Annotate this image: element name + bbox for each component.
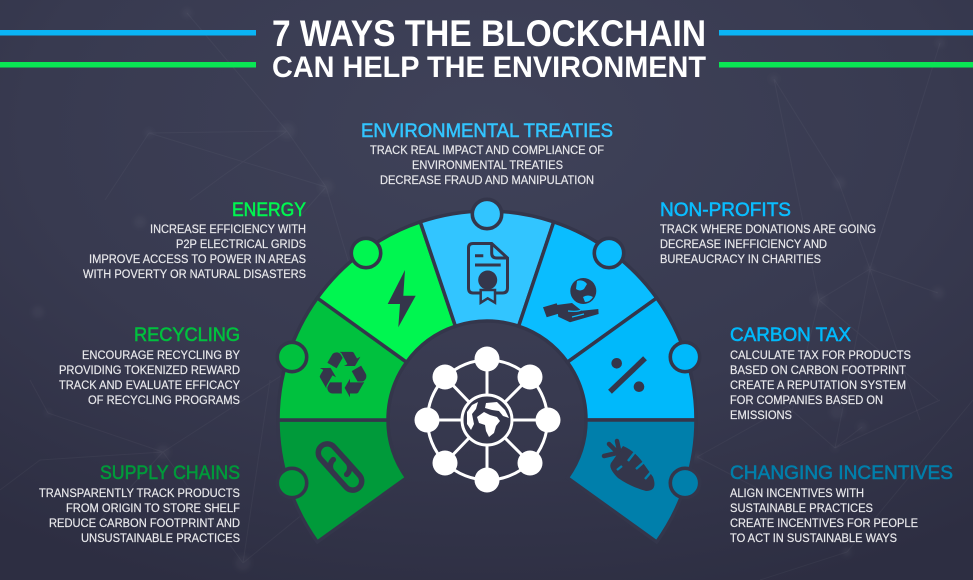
text block: REDUCE CARBON FOOTPRINT AND xyxy=(49,518,240,530)
panel: energy xyxy=(83,199,306,281)
text block xyxy=(59,350,240,407)
text block: BUREAUCRACY IN CHARITIES xyxy=(660,254,821,266)
panel: supply chains xyxy=(39,462,240,545)
title line 1: 7 WAYS THE BLOCKCHAIN xyxy=(272,13,706,54)
icon: certificate xyxy=(468,244,508,303)
segment: environmental treaties xyxy=(420,211,554,326)
title xyxy=(0,13,973,84)
text block: WITH POVERTY OR NATURAL DISASTERS xyxy=(83,269,306,281)
text block: TRACK AND EVALUATE EFFICACY xyxy=(59,380,240,392)
heading: ENVIRONMENTAL TREATIES xyxy=(361,120,613,142)
center blockchain network icon xyxy=(414,346,560,492)
text block: PROVIDING TOKENIZED REWARD xyxy=(59,365,240,377)
text block: UNSUSTAINABLE PRACTICES xyxy=(81,533,240,545)
heading: CHANGING INCENTIVES xyxy=(730,462,953,484)
segment: supply chains xyxy=(278,420,407,542)
title bars right xyxy=(719,30,973,68)
heading: RECYCLING xyxy=(134,324,240,346)
text block xyxy=(730,488,918,545)
segment: recycling xyxy=(278,298,407,420)
text block: TRANSPARENTLY TRACK PRODUCTS xyxy=(39,488,240,500)
icon: lightning bolt xyxy=(388,270,416,327)
panel: non-profits xyxy=(660,199,876,266)
panel: recycling xyxy=(59,324,240,407)
text block: CREATE INCENTIVES FOR PEOPLE xyxy=(730,518,918,530)
text block: ENCOURAGE RECYCLING BY xyxy=(82,350,240,362)
segment: carbon tax xyxy=(567,298,696,420)
text block xyxy=(39,488,240,545)
network rim and spokes xyxy=(427,359,548,480)
text block: CALCULATE TAX FOR PRODUCTS xyxy=(730,350,911,362)
heading: CARBON TAX xyxy=(730,324,851,346)
text block: TRACK WHERE DONATIONS ARE GOING xyxy=(660,224,876,236)
text block: OF RECYCLING PROGRAMS xyxy=(88,395,240,407)
text block: EMISSIONS xyxy=(730,410,792,422)
text block: FROM ORIGIN TO STORE SHELF xyxy=(66,503,240,515)
icon: chain link xyxy=(315,440,365,494)
icon: percent xyxy=(610,358,645,392)
segment: energy xyxy=(317,222,455,362)
node dot: incentives xyxy=(670,468,700,498)
text block: TO ACT IN SUSTAINABLE WAYS xyxy=(730,533,897,545)
text block: INCREASE EFFICIENCY WITH xyxy=(150,224,306,236)
text block: SUSTAINABLE PRACTICES xyxy=(730,503,873,515)
text block xyxy=(370,145,604,187)
node dot: treaties xyxy=(472,199,502,229)
text block: ENVIRONMENTAL TREATIES xyxy=(412,160,563,172)
heading: ENERGY xyxy=(232,199,306,221)
node dot: recycling xyxy=(277,342,307,372)
title line 2: CAN HELP THE ENVIRONMENT xyxy=(272,51,706,84)
segment: changing incentives xyxy=(567,420,696,542)
semicircular wheel xyxy=(277,199,700,542)
text block xyxy=(660,224,876,266)
icon: carrot xyxy=(604,441,654,491)
node dot: carbon tax xyxy=(670,342,700,372)
segment: non-profits xyxy=(519,222,657,362)
title bars left xyxy=(0,30,256,68)
panel: environmental treaties xyxy=(361,120,613,187)
heading: SUPPLY CHAINS xyxy=(100,462,240,484)
text block: FOR COMPANIES BASED ON xyxy=(730,395,883,407)
panel: changing incentives xyxy=(730,462,953,545)
text block: IMPROVE ACCESS TO POWER IN AREAS xyxy=(89,254,306,266)
icon: recycling: ♻ xyxy=(314,339,372,413)
text block: DECREASE FRAUD AND MANIPULATION xyxy=(380,175,594,187)
text block: BASED ON CARBON FOOTPRINT xyxy=(730,365,906,377)
node dot: energy xyxy=(351,238,381,268)
heading: NON-PROFITS xyxy=(660,199,791,221)
icon: hand holding globe xyxy=(543,278,599,322)
text block: CREATE A REPUTATION SYSTEM xyxy=(730,380,906,392)
panel: carbon tax xyxy=(730,324,911,422)
text block: P2P ELECTRICAL GRIDS xyxy=(176,239,306,251)
text block xyxy=(730,350,911,422)
node dot: supply chains xyxy=(277,468,307,498)
globe hub xyxy=(462,395,512,445)
text block: TRACK REAL IMPACT AND COMPLIANCE OF xyxy=(370,145,604,157)
text block: DECREASE INEFFICIENCY AND xyxy=(660,239,827,251)
network nodes xyxy=(414,346,560,492)
node dot: non-profits xyxy=(594,238,624,268)
text block xyxy=(83,224,306,281)
text block: ALIGN INCENTIVES WITH xyxy=(730,488,864,500)
